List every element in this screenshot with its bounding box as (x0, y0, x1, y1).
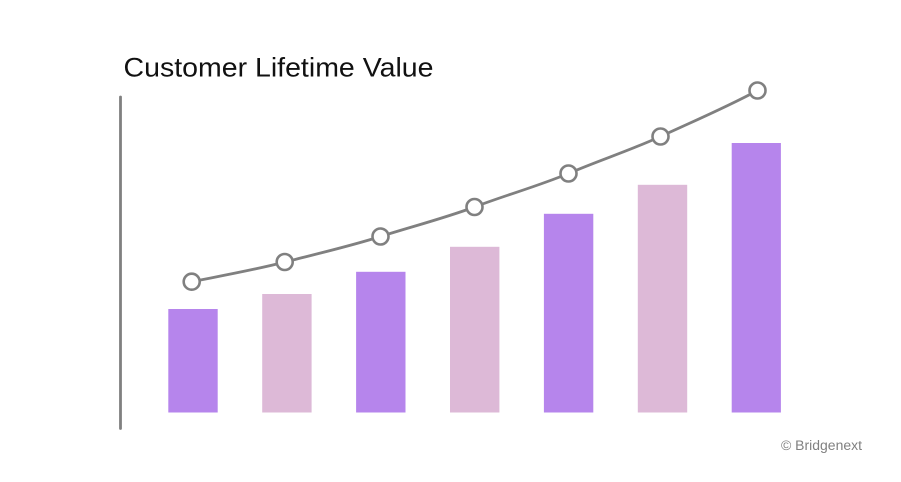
title: Customer Lifetime Value (124, 53, 434, 83)
y axis (119, 97, 122, 428)
bar 3 (356, 272, 406, 412)
bar 6 (638, 185, 687, 412)
trend line with markers (184, 82, 765, 290)
bar 7 (732, 143, 781, 412)
bar 4 (450, 247, 499, 412)
bar 2 (262, 294, 312, 412)
copyright credit: © Bridgenext (781, 438, 862, 453)
bars (168, 143, 781, 412)
bar 1 (168, 309, 218, 412)
bar 5 (544, 214, 593, 412)
